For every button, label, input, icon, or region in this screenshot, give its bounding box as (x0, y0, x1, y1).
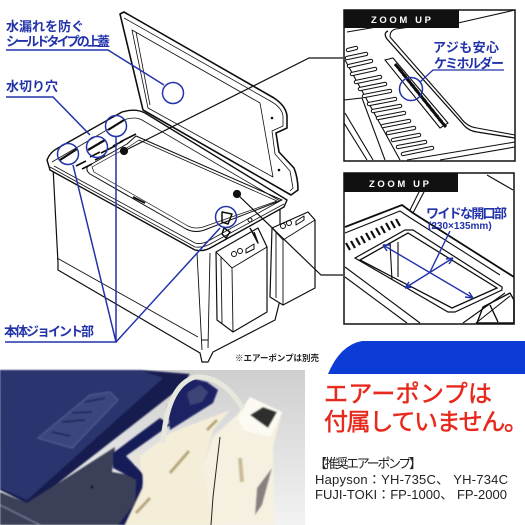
drain hole callout line (6, 97, 108, 158)
photo: pump edge (211, 437, 220, 525)
callout leader lines to zoom panels (120, 58, 343, 275)
dimension arrows (383, 231, 473, 298)
chemi holder callout (400, 40, 504, 100)
wide opening label: ワイドな開口部 (426, 206, 507, 221)
header: zoom up (344, 173, 458, 192)
photo: emboss (38, 392, 118, 448)
header: zoom up (344, 10, 459, 28)
blue annotations (5, 50, 236, 342)
wide opening label (426, 206, 507, 232)
photo: cooler with air pump (0, 370, 305, 525)
photo: pump body (203, 397, 282, 525)
photo: lid back strip (0, 370, 190, 505)
label: body joint: 本体ジョイント部 (4, 324, 94, 339)
photo: cream rim and wall (125, 410, 230, 525)
leader upper (120, 58, 343, 154)
photo: tray (0, 447, 142, 525)
label: lid: 水漏れを防ぐ (6, 19, 84, 34)
panel: zoom up bottom (344, 173, 514, 324)
box rim (47, 110, 287, 251)
recommended pump list: FUJI-TOKI：FP-1000、 FP-2000 (315, 487, 507, 502)
white overlay behind text (305, 374, 525, 525)
cooler box line drawing (47, 12, 315, 362)
leader lower (234, 190, 343, 275)
photo: air tube (163, 377, 242, 441)
photo: pump label (250, 407, 277, 428)
photo: lid top surface (0, 370, 163, 500)
photo: navy rim (113, 418, 170, 525)
header: zoom up: ZOOM UP (369, 179, 432, 190)
panel: zoom up top (344, 10, 515, 161)
heading: pump not included: エアーポンプは (324, 381, 492, 408)
recommended pump list: Hapyson：YH-735C、 YH-734C (315, 472, 508, 487)
box body (53, 167, 280, 362)
front air pump (216, 212, 267, 332)
wide opening label: (230×135mm) (428, 221, 492, 232)
open lid (120, 12, 298, 195)
heading: pump not included: 付属していません。 (324, 409, 525, 436)
photo: pump logo (255, 468, 272, 515)
ventilation slots (347, 48, 432, 154)
lid callout line (6, 50, 184, 104)
joint callout lines (5, 116, 236, 342)
label: drain holes: 水切り穴 (6, 79, 58, 94)
note: pump sold separately: ※エアーポンプは別売 (235, 353, 319, 363)
recommended pump list: 【推奨エアーポンプ】 (314, 456, 422, 471)
recommended pump list (314, 456, 508, 502)
chemi holder callout: アジも安心 (433, 40, 499, 55)
photo: handle (167, 377, 218, 430)
heading: pump not included (324, 381, 525, 436)
header: zoom up: ZOOM UP (371, 15, 434, 26)
label: lid: シールドタイプの上蓋 (6, 34, 110, 49)
label: lid (6, 19, 110, 49)
panel: blue banner shape (328, 341, 525, 374)
chemi holder callout: ケミホルダー (434, 56, 504, 71)
right air pump (270, 212, 315, 305)
